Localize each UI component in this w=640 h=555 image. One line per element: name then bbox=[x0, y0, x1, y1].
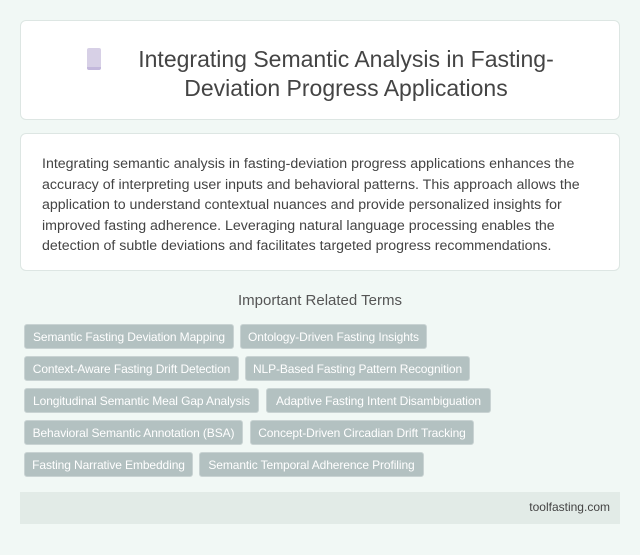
description text: Integrating semantic analysis in fasting-deviation progress applications enhances the accuracy of interpreting user inputs and behavioral patterns. This approach allows the application to understand contextual nuances and provide personalized insights for improved fasting adherence. Leveraging natural language processing enables the detection of subtle deviations and facilitates targeted progress recommendations. bbox=[42, 156, 580, 254]
title: Integrating Semantic Analysis in Fasting-Deviation Progress Applications bbox=[138, 46, 554, 101]
tags: NLP-Based Fasting Pattern Recognition bbox=[253, 362, 462, 376]
section heading: Important Related Terms bbox=[238, 292, 402, 309]
tags: Adaptive Fasting Intent Disambiguation bbox=[276, 394, 481, 408]
tags: Fasting Narrative Embedding bbox=[32, 458, 185, 472]
header card bbox=[20, 20, 620, 120]
footer site text: toolfasting.com bbox=[529, 500, 610, 514]
tags: Semantic Temporal Adherence Profiling bbox=[208, 458, 415, 472]
description card bbox=[20, 133, 620, 271]
tags: Ontology-Driven Fasting Insights bbox=[248, 330, 419, 344]
tags: Behavioral Semantic Annotation (BSA) bbox=[33, 426, 234, 440]
icon: document bbox=[87, 48, 101, 70]
tags: Semantic Fasting Deviation Mapping bbox=[33, 330, 225, 344]
tags: Longitudinal Semantic Meal Gap Analysis bbox=[33, 394, 250, 408]
footer bbox=[20, 492, 620, 524]
tags: Context-Aware Fasting Drift Detection bbox=[33, 362, 230, 376]
tags: Concept-Driven Circadian Drift Tracking bbox=[258, 426, 466, 440]
